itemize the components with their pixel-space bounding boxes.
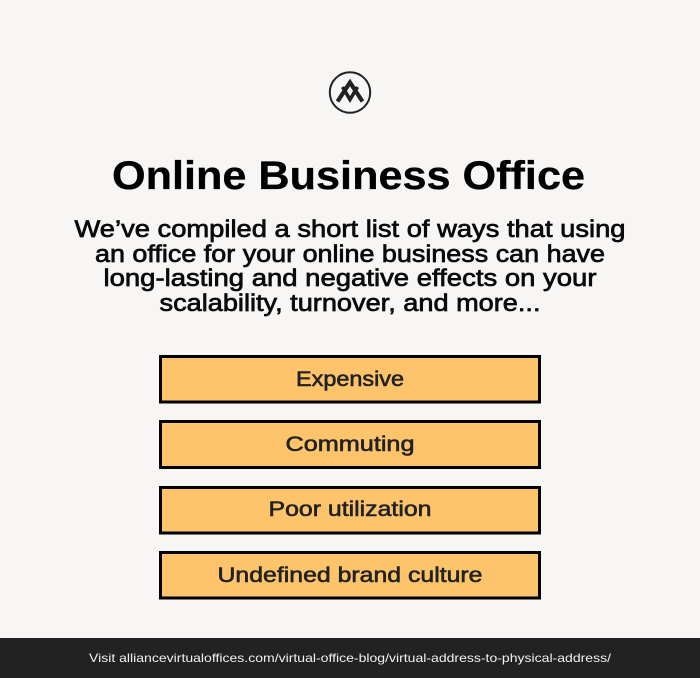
panel: Commuting: [160, 422, 540, 468]
footer bar: Visit alliancevirtualoffices.com/virtual-office-blog/virtual-address-to-physical-address/: [89, 651, 612, 665]
footer bar: [0, 638, 700, 678]
panel: Poor utilization: Poor utilization: [268, 498, 432, 521]
title: Online Business Office: [112, 154, 585, 198]
panel: Poor utilization: [160, 488, 540, 533]
panel: Undefined brand culture: Undefined brand culture: [218, 564, 482, 587]
icon: logo: [330, 72, 370, 113]
panel: Undefined brand culture: [160, 552, 540, 598]
text block: intro: scalability, turnover, and more...: [160, 290, 540, 317]
text block: intro: [74, 216, 626, 317]
text block: intro: an office for your online business can have: [95, 241, 605, 268]
panel: Commuting: Commuting: [286, 433, 414, 456]
text block: intro: long-lasting and negative effects on your: [104, 265, 597, 292]
text block: intro: We’ve compiled a short list of ways that using: [74, 216, 626, 243]
panel: Expensive: [160, 356, 540, 402]
panel: Expensive: Expensive: [296, 368, 404, 391]
